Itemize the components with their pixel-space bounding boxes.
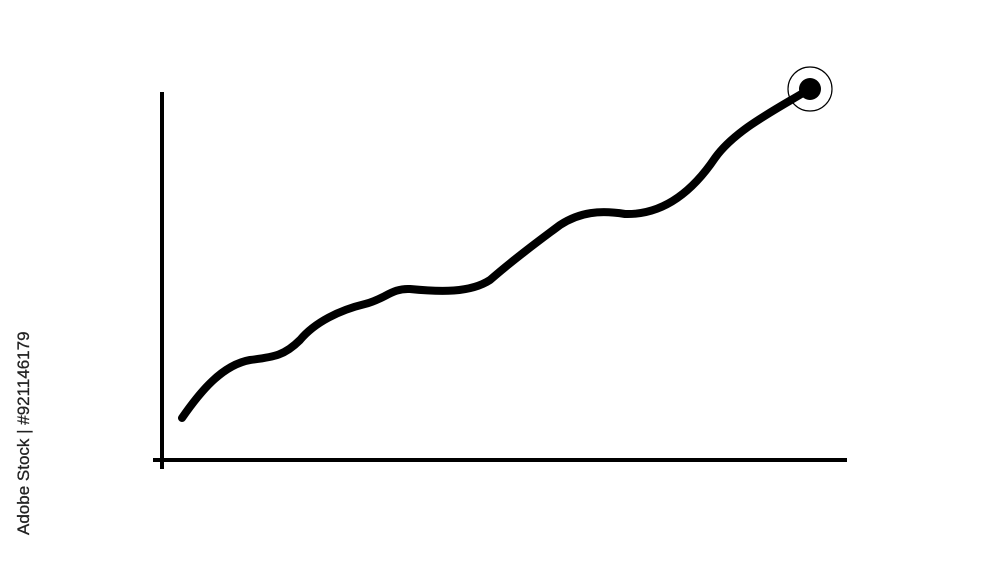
y axis xyxy=(160,92,164,469)
watermark text: Adobe Stock | #921146179 xyxy=(14,331,33,535)
x axis xyxy=(153,458,847,462)
end marker: dot with ring xyxy=(788,67,832,111)
chart: rising line graph xyxy=(153,67,847,469)
data line xyxy=(182,90,808,418)
